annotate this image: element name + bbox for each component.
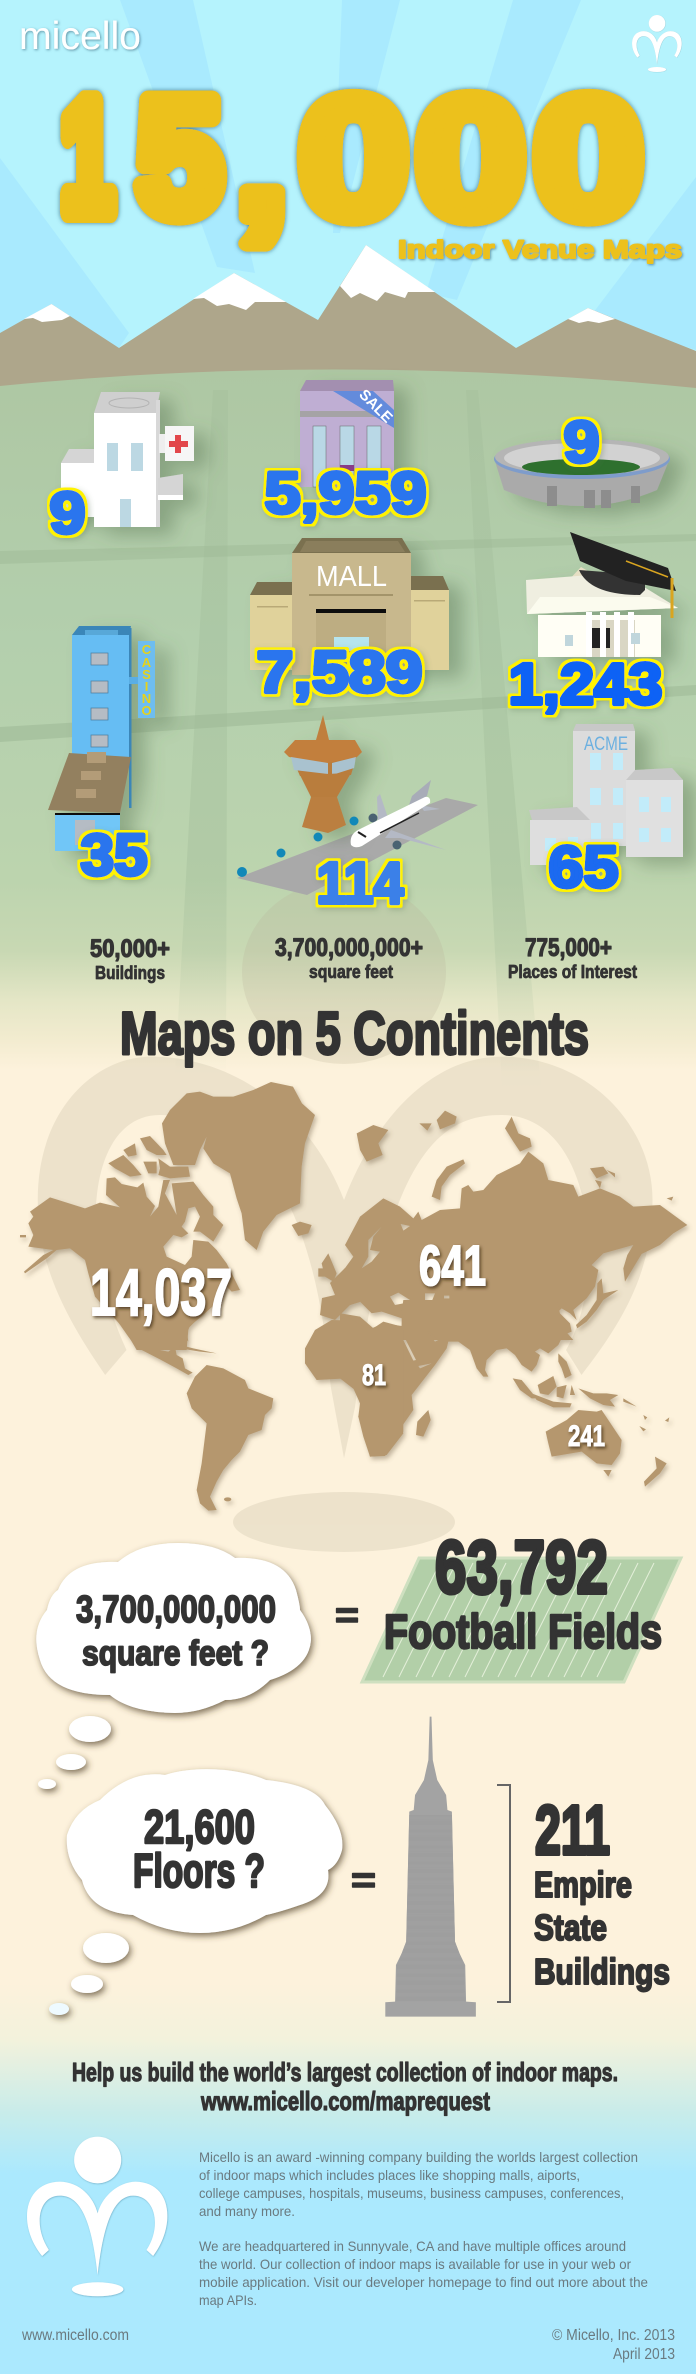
stat: square feet: square feet — [309, 962, 393, 982]
building: casino: S — [142, 667, 151, 682]
asia south, africa east, australia — [340, 1300, 669, 1487]
stat: 211 empire state buildings: 211 — [535, 1791, 610, 1869]
about text — [199, 2149, 648, 2308]
stat: 211 empire state buildings: Buildings — [534, 1951, 670, 1992]
background logo watermark — [38, 880, 653, 1552]
about text: map APIs. — [199, 2292, 257, 2308]
building: mall — [250, 538, 449, 675]
equals sign: = — [351, 1859, 376, 1900]
map number: north america: 14,037 — [90, 1255, 232, 1329]
about text: Micello is an award -winning company building the worlds largest collection — [199, 2149, 638, 2165]
number: 5,959 shops: 5,959 — [264, 461, 426, 526]
building: casino: C — [142, 642, 152, 657]
number: 35 casinos: 35 — [80, 823, 148, 888]
icon: empire state building — [385, 1717, 476, 2017]
about text: the world. Our collection of indoor maps is available for use in your web or — [199, 2256, 631, 2272]
building: office — [529, 724, 683, 865]
world map — [20, 1082, 687, 1511]
cloud text: 21,600 floors: 21,600 — [144, 1800, 255, 1853]
building: office: ACME — [584, 734, 628, 755]
stat: places of interest — [508, 934, 637, 982]
stat: 63,792 football fields — [384, 1525, 662, 1659]
roads — [0, 390, 696, 1088]
stat: buildings — [90, 935, 170, 983]
building: mall: MALL — [316, 561, 387, 593]
thought cloud: square feet — [36, 1543, 311, 1789]
building: casino — [48, 626, 155, 851]
icon: micello logo large — [27, 2137, 167, 2296]
title: 15,000: 5 — [137, 65, 222, 249]
cloud text: 3,700,000,000 square feet: 3,700,000,000 — [76, 1589, 276, 1631]
number: 7,589 malls: 7,589 — [256, 640, 422, 705]
thought cloud: floors — [49, 1769, 342, 2015]
building: casino: I — [145, 679, 148, 694]
building: shop — [300, 380, 396, 487]
title: 15,000: ,000 — [234, 62, 644, 254]
map number: eurasia: 641 — [419, 1234, 486, 1298]
footer: copyright: © Micello, Inc. 2013 — [552, 2327, 675, 2344]
mountains — [0, 245, 696, 400]
micello wordmark: micello — [19, 15, 141, 58]
stat: places of interest: Places of Interest — [508, 962, 637, 982]
number: 114 airports: 114 — [316, 851, 404, 916]
stat: places of interest: 775,000+ — [525, 934, 612, 962]
footer: copyright — [552, 2327, 675, 2363]
equals sign: = — [335, 1594, 359, 1635]
stat: buildings: Buildings — [95, 963, 165, 983]
building: shop: SALE — [355, 386, 396, 427]
building: casino: O — [141, 703, 152, 718]
icon: airplane — [351, 780, 446, 850]
stat: 211 empire state buildings: State — [534, 1907, 607, 1948]
cloud text: 21,600 floors — [133, 1800, 265, 1897]
building: casino: N — [142, 691, 151, 706]
number: 1,243 campuses: 1,243 — [508, 652, 662, 717]
call to action — [72, 2057, 618, 2116]
number: 9 stadiums: 9 — [564, 410, 600, 475]
subtitle: Indoor Venue Maps: Indoor Venue Maps — [398, 236, 682, 264]
central america, south america, africa west — [103, 1300, 403, 1511]
eurasia north — [340, 1111, 687, 1340]
about text: mobile application. Visit our developer homepage to find out more about the — [199, 2274, 648, 2290]
stat: 211 empire state buildings: Empire — [534, 1864, 632, 1905]
stat: 211 empire state buildings — [534, 1791, 670, 1992]
building: casino: A — [142, 655, 152, 670]
icon: graduation cap — [570, 532, 676, 618]
icon: micello logo small — [632, 15, 682, 72]
western europe — [320, 1268, 360, 1320]
call to action: www.micello.com/maprequest — [200, 2086, 490, 2116]
title: 15,000: 1 — [61, 68, 114, 245]
bracket — [497, 1785, 510, 2002]
stat: buildings: 50,000+ — [90, 935, 170, 963]
building: stadium — [494, 439, 670, 508]
cloud text: 3,700,000,000 square feet — [76, 1589, 276, 1673]
north america north, greenland, arctic islands — [20, 1082, 337, 1350]
about text: college campuses, hospitals, museums, business campuses, conferences, — [199, 2185, 624, 2201]
about text: and many more. — [199, 2203, 295, 2219]
sky background — [0, 0, 696, 400]
building: university — [526, 567, 678, 657]
footer: copyright: April 2013 — [613, 2346, 675, 2363]
stat: square feet — [275, 934, 423, 982]
map number: australia: 241 — [568, 1420, 605, 1453]
footer: website: www.micello.com — [21, 2327, 129, 2344]
football field — [362, 1558, 681, 1682]
map number: africa: 81 — [362, 1359, 386, 1392]
about text: We are headquartered in Sunnyvale, CA and have multiple offices around — [199, 2238, 626, 2254]
stat: square feet: 3,700,000,000+ — [275, 934, 423, 962]
number: 65 business campuses: 65 — [548, 835, 618, 900]
cloud text: 3,700,000,000 square feet: square feet ? — [82, 1634, 269, 1673]
about text: of indoor maps which includes places like shopping malls, aiports, — [199, 2167, 580, 2183]
building: hospital — [61, 392, 194, 527]
cloud text: 21,600 floors: Floors ? — [133, 1844, 265, 1897]
number: 9 hospitals: 9 — [50, 481, 86, 546]
stat: 63,792 football fields: 63,792 — [435, 1525, 608, 1609]
building: airport runway and tower — [237, 715, 478, 895]
